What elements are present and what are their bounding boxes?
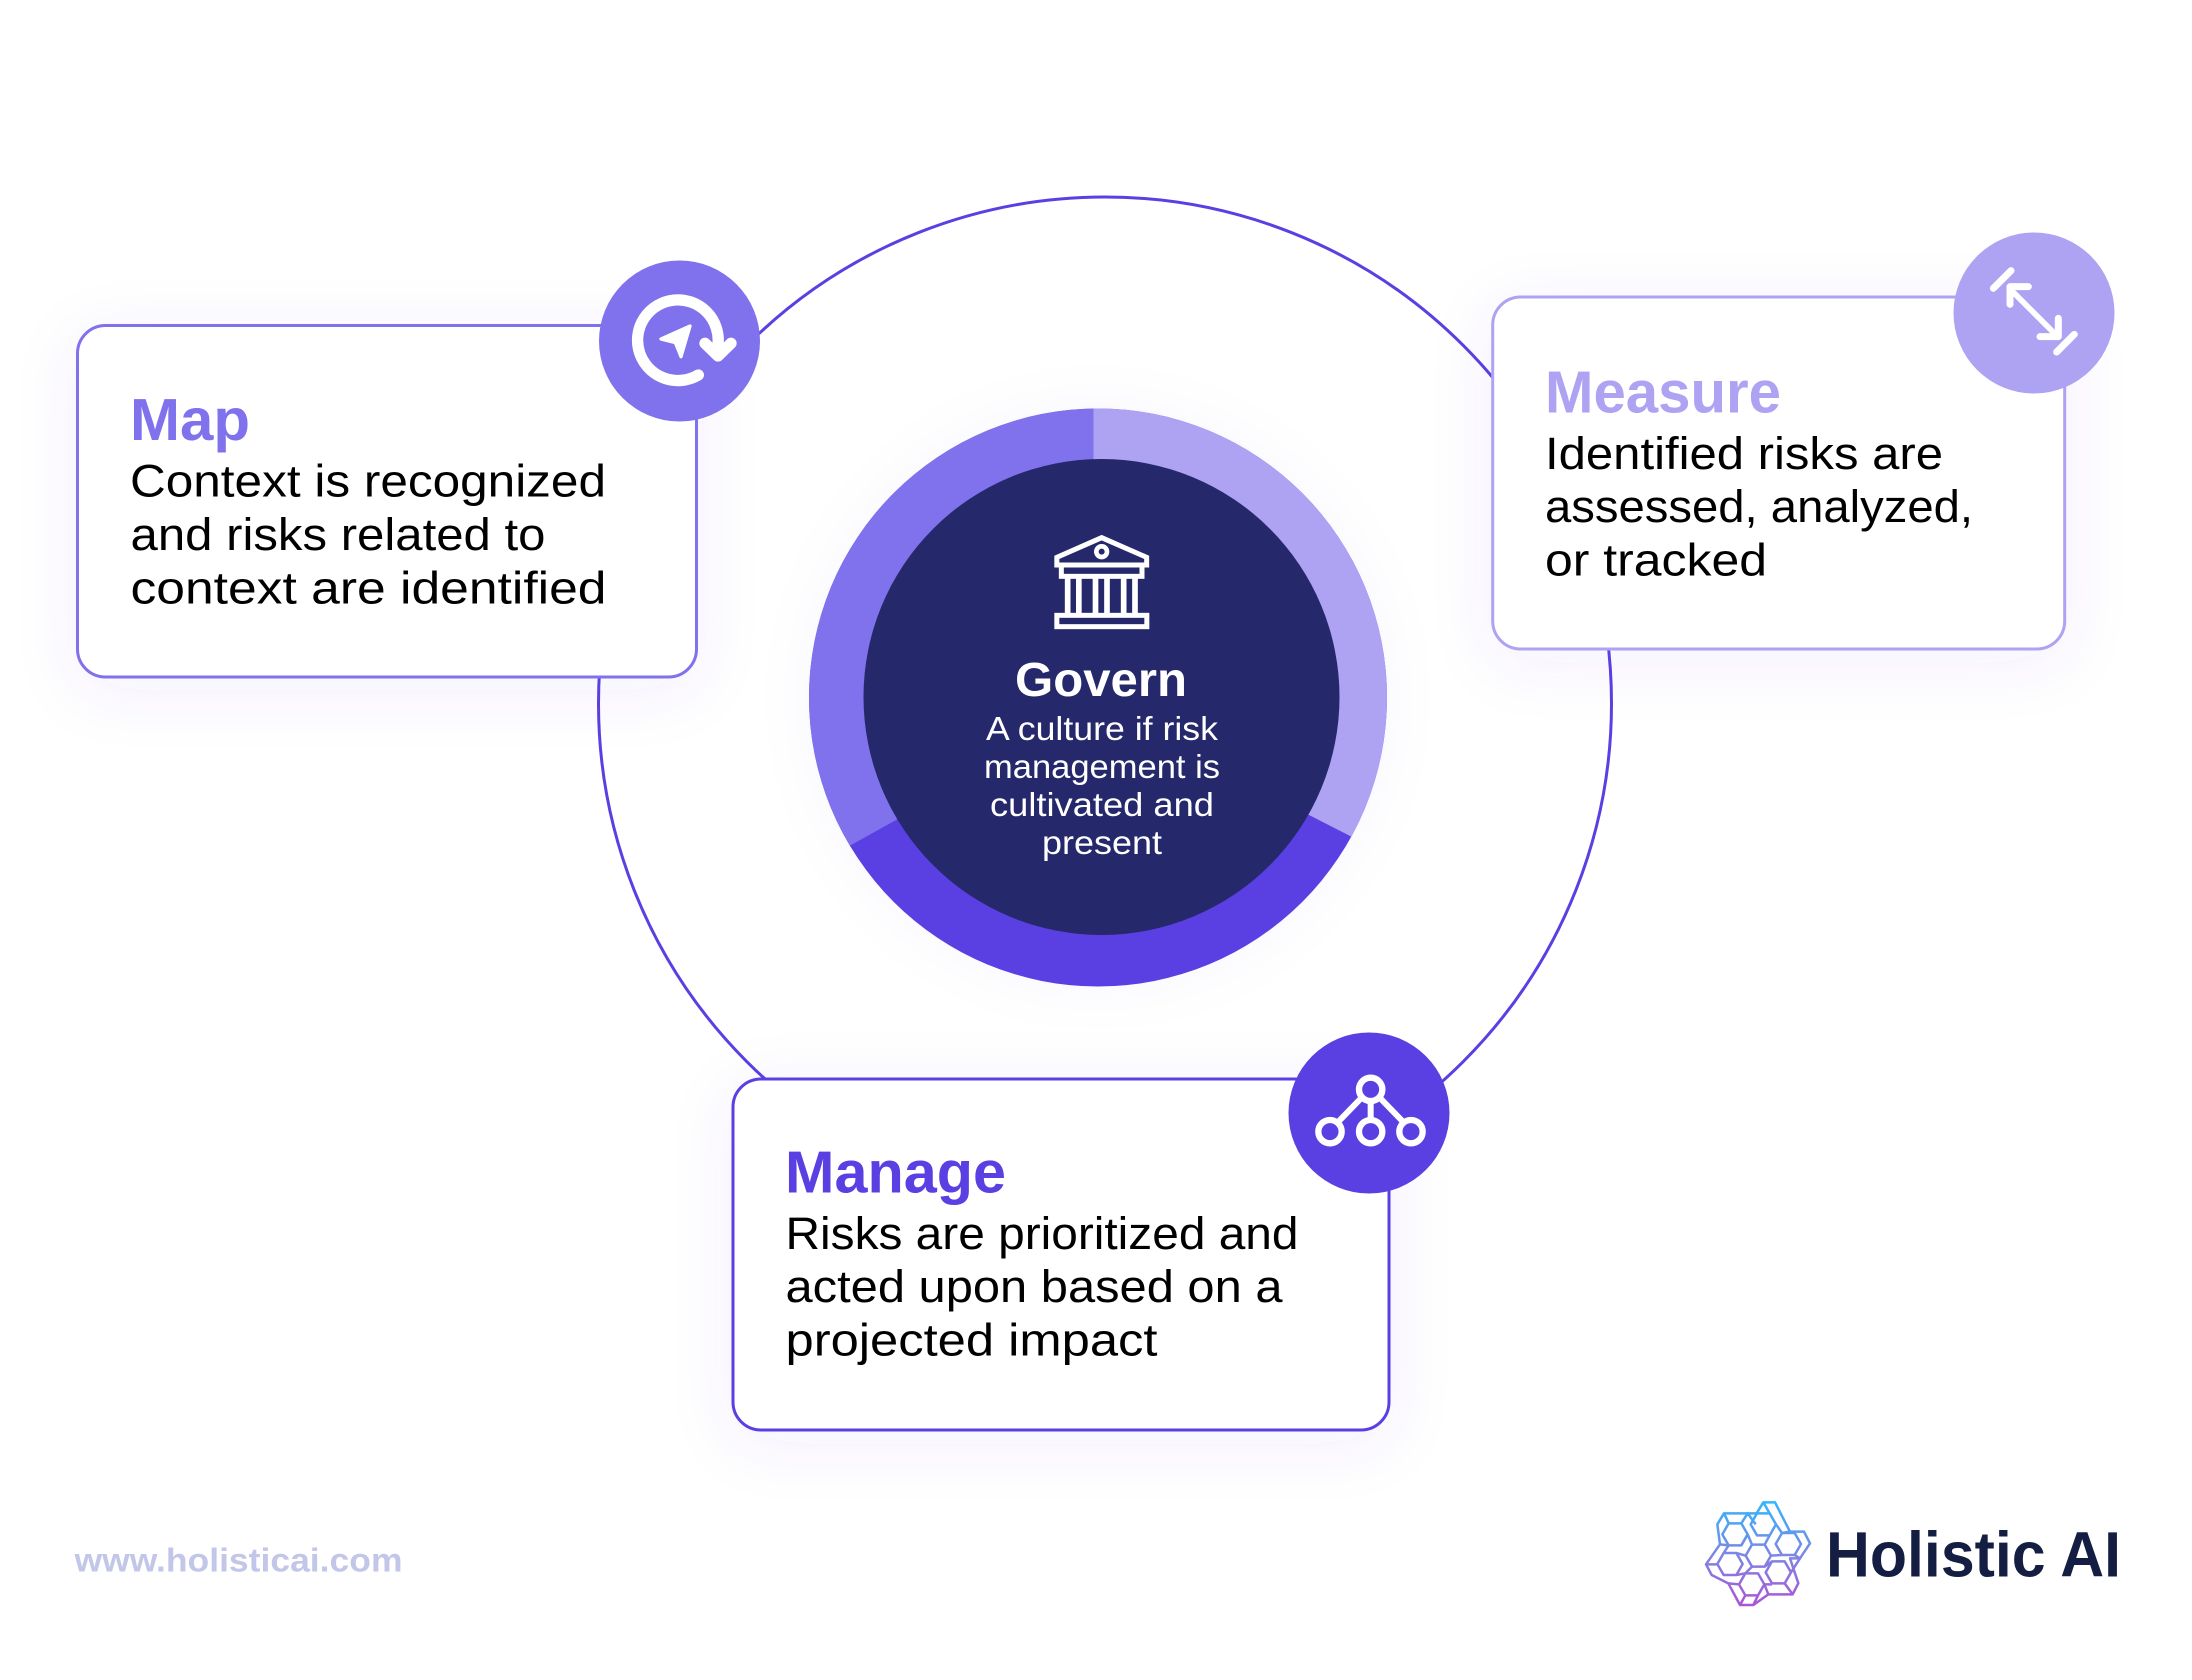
measure description	[1545, 428, 1973, 585]
website url: www.holisticai.com	[73, 1542, 402, 1578]
govern description: management is	[984, 748, 1220, 785]
measure description: assessed, analyzed,	[1545, 481, 1973, 532]
donut segment: manage	[809, 408, 1387, 986]
icon: measure arrows	[1954, 232, 2114, 394]
manage description: projected impact	[786, 1314, 1158, 1365]
manage heading: Manage	[785, 1139, 1006, 1205]
measure card	[1493, 297, 2065, 649]
donut center disc	[864, 459, 1340, 935]
govern description: A culture if risk	[986, 710, 1219, 747]
manage description	[786, 1208, 1298, 1365]
logo hexagon mark	[1706, 1502, 1810, 1605]
map description: Context is recognized	[130, 455, 606, 506]
govern heading: Govern	[1015, 654, 1187, 707]
govern description	[984, 710, 1220, 861]
panel: manage	[733, 1032, 1450, 1430]
center donut: govern	[809, 408, 1387, 986]
map card	[78, 326, 696, 677]
cycle ring connecting the three stages	[598, 197, 1612, 1210]
donut segment: map	[809, 408, 1094, 846]
icon: manage hierarchy	[1288, 1032, 1450, 1194]
govern description: cultivated and	[990, 786, 1214, 823]
map description: and risks related to	[130, 509, 546, 560]
manage card	[733, 1079, 1389, 1430]
icon: map navigation refresh	[599, 260, 760, 422]
icon: government building	[1057, 538, 1147, 627]
map description	[130, 455, 606, 613]
donut segment: measure	[1094, 408, 1387, 836]
manage description: Risks are prioritized and	[786, 1208, 1298, 1259]
map heading: Map	[130, 387, 250, 453]
measure heading: Measure	[1545, 359, 1781, 425]
measure description: or tracked	[1545, 534, 1767, 585]
map description: context are identified	[130, 562, 606, 613]
measure description: Identified risks are	[1545, 428, 1943, 479]
manage description: acted upon based on a	[786, 1261, 1284, 1312]
panel: measure	[1493, 232, 2114, 649]
logo wordmark: Holistic AI	[1826, 1518, 2121, 1590]
panel: map	[78, 260, 760, 677]
logo: holistic ai	[1706, 1502, 2121, 1605]
govern description: present	[1042, 824, 1162, 861]
